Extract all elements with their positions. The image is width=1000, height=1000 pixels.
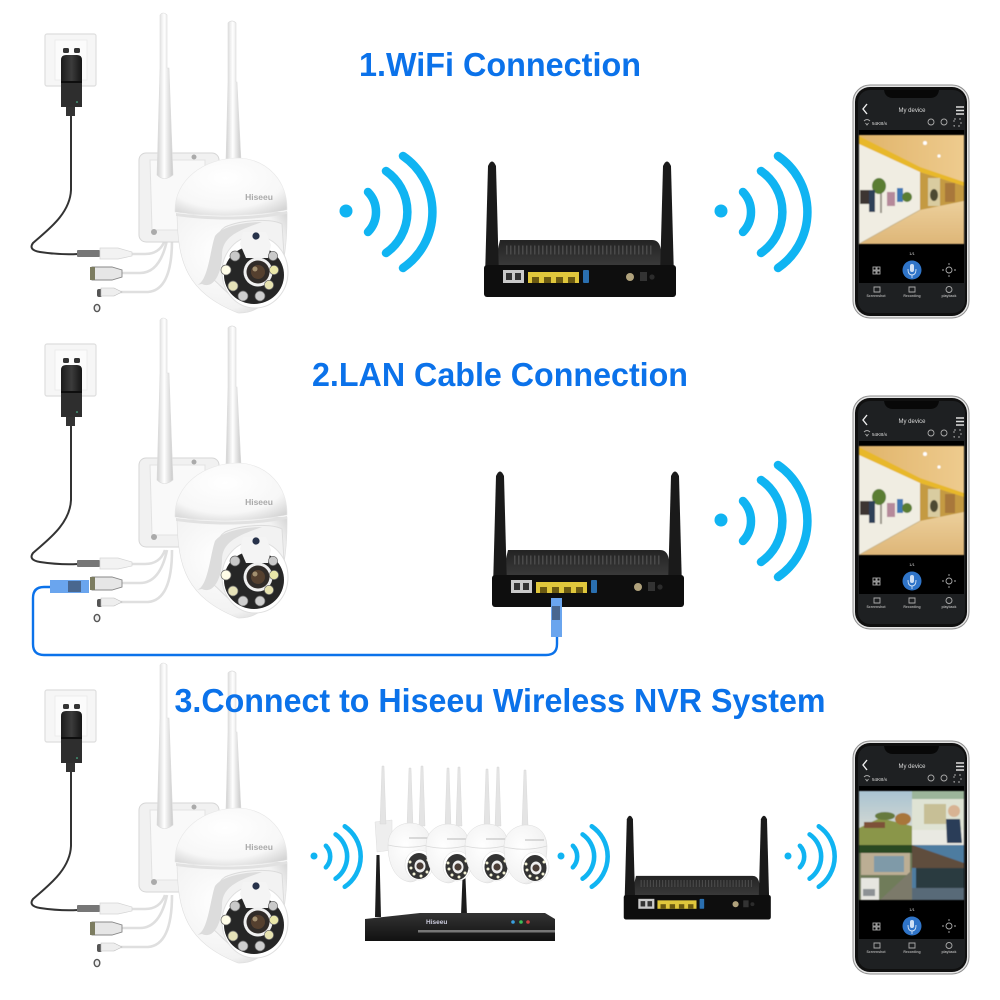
icon: PTZ camera: Hiseeu bbox=[245, 842, 273, 852]
icon: wifi signal router to phone bbox=[784, 826, 835, 887]
icon: phone app with mall view: 1/1 bbox=[909, 251, 916, 256]
icon: phone app with mall view: 54KB/s bbox=[872, 432, 888, 437]
icon: phone app with mall view bbox=[853, 396, 969, 629]
icon: wifi signal camera to NVR bbox=[310, 826, 361, 887]
panel: row 3 NVR system bbox=[32, 663, 969, 974]
icon: camera connector wires bbox=[77, 240, 172, 312]
icon: router bbox=[484, 162, 676, 297]
panel: row 1 WiFi connection bbox=[32, 13, 969, 318]
icon: wall socket and adapter bbox=[32, 344, 96, 564]
icon: wifi signal router to phone bbox=[714, 465, 807, 577]
icon: PTZ camera bbox=[139, 663, 288, 963]
icon: wifi signal NVR to router bbox=[557, 826, 608, 887]
icon: phone app with mall view: Recording bbox=[903, 294, 921, 298]
icon: PTZ camera bbox=[139, 318, 288, 618]
title: WiFi connection: 1.WiFi Connection bbox=[359, 46, 641, 83]
icon: phone app with mall view: playback bbox=[942, 294, 957, 298]
icon: phone app with mall view bbox=[853, 85, 969, 318]
icon: phone app with mall view: 54KB/s bbox=[872, 121, 888, 126]
icon: phone app with mall view: Recording bbox=[903, 605, 921, 609]
icon: phone app with four camera views: Screenshot bbox=[866, 950, 886, 954]
icon: phone app with mall view: playback bbox=[942, 605, 957, 609]
arrow: blue LAN cable bbox=[33, 580, 562, 655]
icon: phone app with four camera views: playback bbox=[942, 950, 957, 954]
icon: NVR kit with four cameras bbox=[365, 766, 555, 941]
icon: phone app with four camera views: 1/1 bbox=[909, 907, 916, 912]
icon: phone app with mall view: 1/1 bbox=[909, 562, 916, 567]
panel: row 2 LAN cable connection bbox=[32, 318, 969, 655]
icon: PTZ camera: Hiseeu bbox=[245, 192, 273, 202]
icon: phone app with mall view: Screenshot bbox=[866, 605, 886, 609]
icon: camera connector wires bbox=[77, 895, 172, 967]
icon: phone app with mall view: My device bbox=[898, 419, 926, 425]
icon: phone app with four camera views: 54KB/s bbox=[872, 777, 888, 782]
icon: PTZ camera: Hiseeu bbox=[245, 497, 273, 507]
icon: wifi signal router to phone bbox=[714, 156, 807, 268]
icon: phone app with four camera views: Recording bbox=[903, 950, 921, 954]
icon: phone app with four camera views bbox=[853, 741, 969, 974]
icon: phone app with four camera views: My device bbox=[898, 764, 926, 770]
icon: NVR kit with four cameras: Hiseeu bbox=[426, 919, 447, 926]
icon: router bbox=[492, 472, 684, 607]
icon: phone app with mall view: Screenshot bbox=[866, 294, 886, 298]
icon: phone app with mall view: My device bbox=[898, 108, 926, 114]
title: LAN cable connection: 2.LAN Cable Connection bbox=[312, 356, 688, 393]
icon: wall socket and adapter bbox=[32, 34, 96, 254]
title: Hiseeu wireless NVR: 3.Connect to Hiseeu Wireless NVR System bbox=[174, 682, 826, 719]
icon: PTZ camera bbox=[139, 13, 288, 313]
icon: wifi signal camera to router bbox=[340, 156, 432, 268]
icon: camera connector wires bbox=[77, 550, 172, 622]
icon: wall socket and adapter bbox=[32, 690, 96, 910]
icon: router bbox=[624, 816, 771, 920]
